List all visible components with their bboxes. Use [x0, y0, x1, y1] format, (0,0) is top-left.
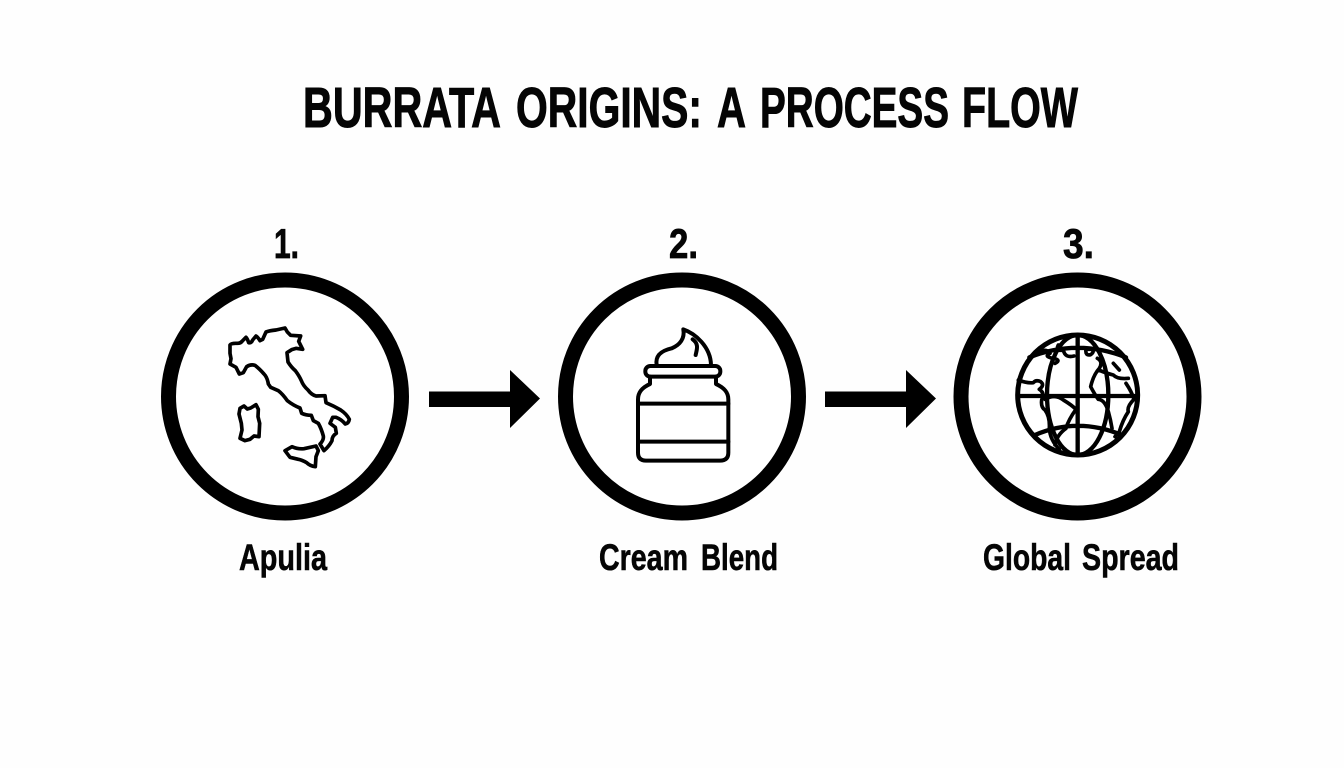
step label 3 [983, 537, 1179, 578]
step label 2: Cream [599, 537, 688, 578]
title [303, 76, 1078, 140]
title: A [717, 76, 746, 140]
step label 2: Blend [701, 537, 778, 578]
arrow 1 to 2 [429, 370, 540, 428]
title: BURRATA [303, 76, 501, 140]
step circle 1 [168, 280, 402, 513]
step circle 2 [566, 280, 798, 513]
title: FLOW [962, 76, 1078, 140]
step circle 3 [961, 280, 1194, 513]
icon: map of Italy [230, 328, 349, 467]
step label 1: Apulia [239, 537, 327, 578]
arrow 2 to 3 [825, 370, 936, 428]
step 2: Cream Blend [566, 220, 798, 578]
icon: cream jar [638, 329, 728, 461]
step number 1: 1. [274, 220, 299, 267]
step number 3: 3. [1063, 220, 1094, 267]
step 3: Global Spread [961, 220, 1194, 578]
step label 3: Global [983, 537, 1071, 578]
title: ORIGINS: [516, 76, 702, 140]
step label 3: Spread [1082, 537, 1179, 578]
step 1: Apulia [168, 220, 402, 578]
icon: globe [1018, 335, 1138, 455]
title: PROCESS [760, 76, 949, 140]
step number 2: 2. [669, 220, 698, 267]
step label 2 [599, 537, 778, 578]
